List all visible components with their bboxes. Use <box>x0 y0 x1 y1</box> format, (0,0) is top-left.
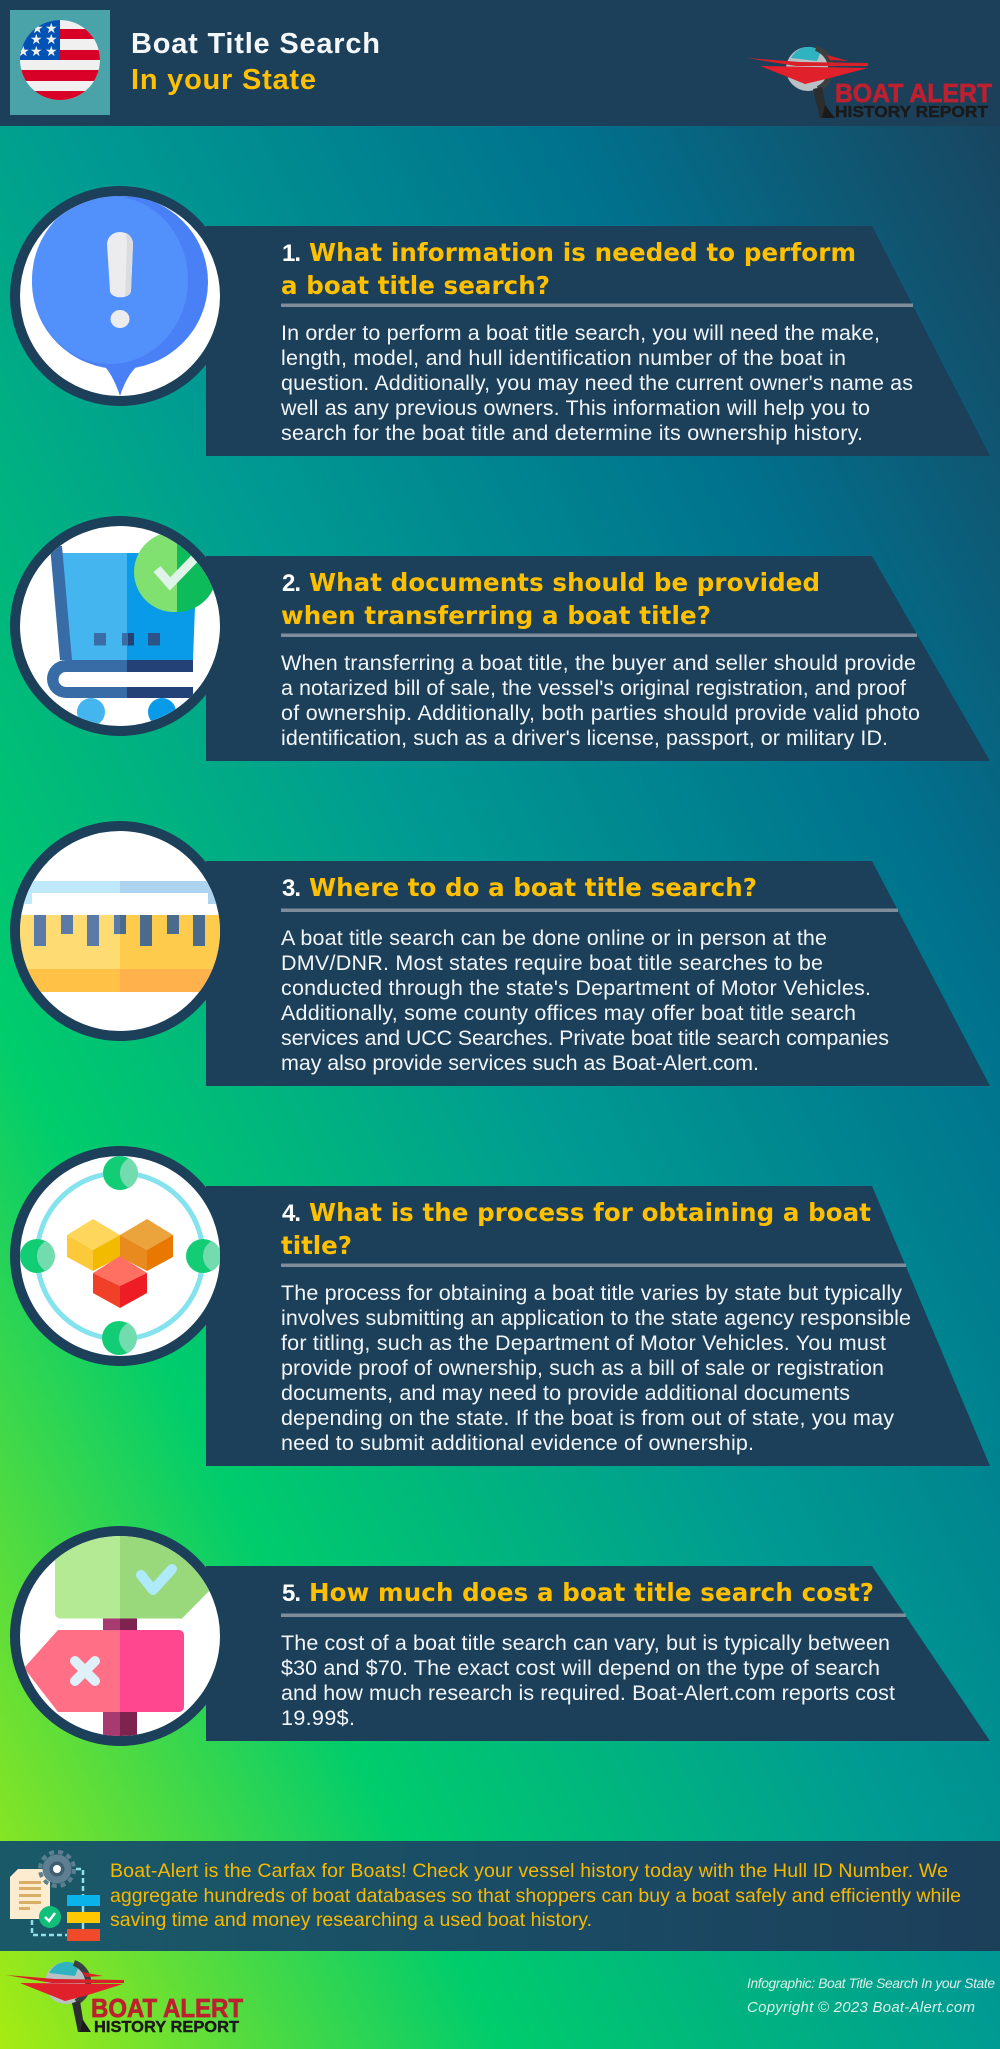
panel 4 <box>206 1186 990 1466</box>
title: In your State <box>131 64 316 96</box>
icon: shopping cart with check <box>15 521 225 731</box>
heading 4 <box>281 1198 871 1260</box>
body text 5: The cost of a boat title search can vary, but is typically between <box>281 1631 890 1655</box>
body text 4: depending on the state. If the boat is from out of state, you may <box>281 1406 894 1430</box>
heading 2: 2. <box>282 570 301 597</box>
icon: US flag tile: ★ <box>30 44 43 60</box>
promo band <box>0 1841 1000 1951</box>
title <box>131 28 380 96</box>
title: Boat Title Search <box>131 28 380 60</box>
body text 5: 19.99$. <box>281 1706 355 1730</box>
icon: cubes in ring <box>15 1151 225 1361</box>
body text 4: involves submitting an application to the state agency responsible <box>281 1306 911 1330</box>
body text 2 <box>281 651 920 750</box>
body text 3: may also provide services such as Boat-Alert.com. <box>281 1051 759 1075</box>
body text 1: search for the boat title and determine its ownership history. <box>281 421 863 445</box>
icon: US flag tile <box>10 10 110 115</box>
copyright text <box>747 1976 995 2016</box>
body text 5: and how much research is required. Boat-Alert.com reports cost <box>281 1681 895 1705</box>
body text 2: When transferring a boat title, the buyer and seller should provide <box>281 651 916 675</box>
body text 2: identification, such as a driver's license, passport, or military ID. <box>281 726 888 750</box>
icon: ruler <box>15 826 225 1036</box>
promo text: aggregate hundreds of boat databases so that shoppers can buy a boat safely and efficiently while <box>110 1885 961 1907</box>
body text 5 <box>281 1631 895 1730</box>
body text 3: conducted through the state's Department of Motor Vehicles. <box>281 976 871 1000</box>
body text 1: question. Additionally, you may need the current owner's name as <box>281 371 913 395</box>
promo text: Boat-Alert is the Carfax for Boats! Check your vessel history today with the Hull ID Number. We <box>110 1860 948 1882</box>
body text 2: of ownership. Additionally, both parties should provide valid photo <box>281 701 920 725</box>
header bar <box>0 0 1000 126</box>
body text 5: $30 and $70. The exact cost will depend on the type of search <box>281 1656 880 1680</box>
body text 1 <box>280 321 913 445</box>
heading 2: What documents should be provided <box>309 568 820 597</box>
copyright text: Infographic: Boat Title Search In your State <box>747 1976 995 1991</box>
logo: Boat Alert footer: BOAT ALERT <box>91 1993 243 2023</box>
heading 2 <box>281 568 820 630</box>
body text 4: need to submit additional evidence of ownership. <box>281 1431 754 1455</box>
heading 1 <box>281 238 856 300</box>
heading 3: Where to do a boat title search? <box>309 873 757 902</box>
panel 3 <box>206 861 990 1086</box>
heading 3: 3. <box>282 875 301 902</box>
body text 3: DMV/DNR. Most states require boat title searches to be <box>281 951 823 975</box>
heading 2: when transferring a boat title? <box>281 601 711 630</box>
icon: US flag tile: ★ <box>31 21 44 37</box>
panel 1 <box>206 226 990 456</box>
panel 5 <box>206 1566 990 1741</box>
logo: Boat Alert header: HISTORY REPORT <box>835 104 988 121</box>
heading 4: What is the process for obtaining a boat <box>309 1198 871 1227</box>
body text 4: for titling, such as the Department of Motor Vehicles. You must <box>281 1331 886 1355</box>
body text 2: a notarized bill of sale, the vessel's original registration, and proof <box>281 676 906 700</box>
icon: US flag tile: ★ <box>45 44 58 60</box>
heading 1: 1. <box>282 240 301 267</box>
logo: Boat Alert footer: HISTORY REPORT <box>94 2019 239 2036</box>
icon: alert speech bubble <box>15 191 225 401</box>
promo text: saving time and money researching a used boat history. <box>110 1909 592 1931</box>
body text 1: length, model, and hull identification number of the boat in <box>281 346 846 370</box>
icon: US flag tile: ★ <box>17 44 30 60</box>
heading 4: title? <box>281 1231 352 1260</box>
body text 3: A boat title search can be done online or in person at the <box>281 926 827 950</box>
body text 3 <box>281 926 889 1075</box>
icon: US flag tile: ★ <box>30 32 43 48</box>
panel 2 <box>206 556 990 761</box>
body text 4: documents, and may need to provide additional documents <box>281 1381 850 1405</box>
logo: Boat Alert footer <box>6 1962 243 2036</box>
body text 3: services and UCC Searches. Private boat title search companies <box>281 1026 889 1050</box>
heading 1: What information is needed to perform <box>309 238 856 267</box>
body text 4: The process for obtaining a boat title varies by state but typically <box>281 1281 902 1305</box>
heading 1: a boat title search? <box>281 271 550 300</box>
body text 1: well as any previous owners. This information will help you to <box>280 396 870 420</box>
heading 5: 5. <box>282 1580 301 1607</box>
logo: Boat Alert header <box>747 47 992 121</box>
body text 1: In order to perform a boat title search, you will need the make, <box>281 321 880 345</box>
icon: signpost <box>15 1530 225 1741</box>
logo: Boat Alert header: BOAT ALERT <box>835 78 992 108</box>
icon: US flag tile: ★ <box>45 21 58 37</box>
body text 4: provide proof of ownership, such as a bill of sale or registration <box>281 1356 884 1380</box>
body text 3: Additionally, some county offices may offer boat title search <box>281 1001 856 1025</box>
promo text <box>110 1860 961 1931</box>
copyright text: Copyright © 2023 Boat-Alert.com <box>747 1999 975 2016</box>
heading 5: How much does a boat title search cost? <box>309 1578 874 1607</box>
icon: US flag tile: ★ <box>45 32 58 48</box>
icon: document workflow <box>10 1852 100 1941</box>
heading 4: 4. <box>282 1200 301 1227</box>
body text 4 <box>281 1281 911 1455</box>
